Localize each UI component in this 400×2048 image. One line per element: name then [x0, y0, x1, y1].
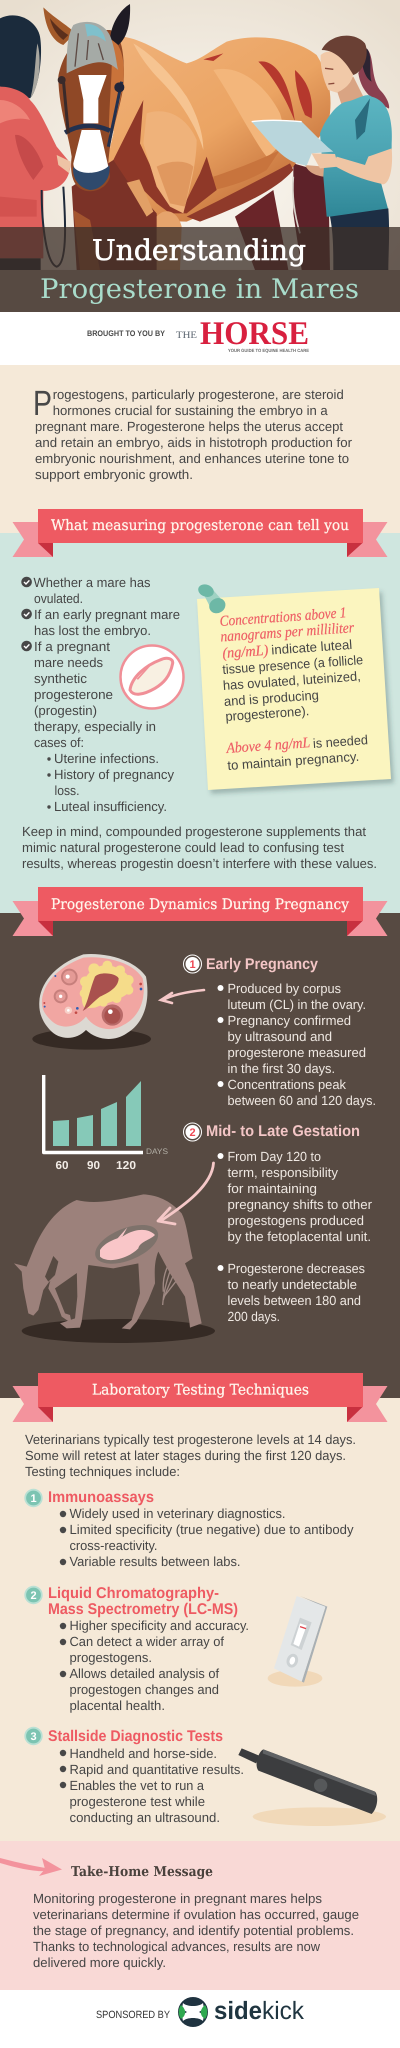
illustration: pregnant mare: [14, 1194, 215, 1343]
title bands: [0, 227, 400, 312]
checklist: what progesterone tells you: Uterine infections.: [54, 751, 159, 766]
gestation bullets: to nearly undetectable: [228, 1277, 357, 1292]
brought to you by The Horse logo: BROUGHT TO YOU BY: [87, 329, 166, 338]
sticky note: indicate luteal: [271, 637, 353, 657]
brought to you by The Horse logo: THE: [176, 330, 197, 341]
mid to late gestation heading: 2: [189, 1127, 196, 1139]
note on compounded supplements: results, whereas progestin doesn’t interfere with these values.: [22, 856, 377, 871]
gestation bullets: progestogens produced: [228, 1213, 364, 1228]
stallside diagnostic tests: 3: [30, 1731, 37, 1743]
tail hairs: [163, 1265, 178, 1305]
drop cap: P: [33, 384, 52, 423]
sponsored by sidekick logo: SPONSORED BY: [96, 2009, 170, 2021]
stallside diagnostic tests: progesterone test while: [70, 1794, 205, 1809]
vet on the right: [252, 36, 392, 270]
ribbon heading: what measuring progesterone can tell you: What measuring progesterone can tell you: [51, 518, 349, 534]
gestation bullets: [218, 1149, 373, 1324]
checklist: what progesterone tells you: History of pregnancy: [54, 767, 174, 782]
hero illustration: vets with horse: [0, 0, 400, 312]
corpus luteum: [80, 961, 134, 1008]
note on compounded supplements: [22, 824, 377, 871]
gestation bullets: pregnancy shifts to other: [228, 1197, 373, 1212]
sponsored by sidekick logo: side: [214, 1997, 262, 2025]
checklist: what progesterone tells you: If an early pregnant mare: [34, 607, 180, 622]
title: Progesterone in Mares: [40, 274, 359, 305]
early pregnancy bullets: luteum (CL) in the ovary.: [228, 997, 366, 1012]
ribbon heading: progesterone dynamics during pregnancy: [12, 887, 388, 936]
check icon: [21, 609, 32, 619]
horse head: [43, 4, 130, 191]
icon: sidekick mark: [178, 1997, 208, 2027]
testing intro: Some will retest at later stages during the first 120 days.: [25, 1448, 346, 1463]
liquid chromatography: Can detect a wider array of: [70, 1634, 224, 1649]
checklist: what progesterone tells you: (progestin): [34, 703, 97, 718]
gestation bullets: term, responsibility: [228, 1165, 338, 1180]
checklist: what progesterone tells you: loss.: [54, 783, 80, 798]
take-home message: [0, 1858, 359, 1970]
checklist: what progesterone tells you: ovulated.: [34, 591, 83, 606]
illustration: test cassette: [268, 1596, 327, 1687]
gestation bullets: by the fetoplacental unit.: [228, 1229, 371, 1244]
early pregnancy heading: 1: [189, 959, 196, 971]
liquid chromatography: placental health.: [70, 1698, 165, 1713]
sticky note: to maintain pregnancy.: [227, 749, 360, 773]
stallside diagnostic tests: Enables the vet to run a: [70, 1778, 205, 1793]
stallside diagnostic tests: Stallside Diagnostic Tests: [48, 1728, 223, 1745]
take-home message: veterinarians determine if ovulation has occurred, gauge: [33, 1907, 359, 1922]
liquid chromatography: 2: [30, 1590, 37, 1602]
take-home message: Take-Home Message: [71, 1864, 213, 1880]
early pregnancy bullets: Concentrations peak: [228, 1077, 346, 1092]
liquid chromatography: Higher specificity and accuracy.: [70, 1618, 249, 1633]
arrow: to ovary: [161, 990, 204, 1003]
brought to you by The Horse logo: [87, 316, 309, 353]
gestation bullets: for maintaining: [228, 1181, 317, 1196]
sticky note: and is producing: [223, 687, 319, 709]
check icon: [21, 641, 32, 651]
checklist: what progesterone tells you: mare needs: [34, 655, 103, 670]
early pregnancy bullets: Pregnancy confirmed: [228, 1013, 351, 1028]
bar chart: progesterone by days: 90: [87, 1160, 100, 1172]
sticky note: tissue presence (a follicle: [222, 652, 364, 677]
sticky note: [196, 582, 394, 794]
follicles: [54, 969, 123, 1026]
checklist: what progesterone tells you: Whether a mare has: [34, 575, 151, 590]
horse hip stripes: [203, 53, 312, 122]
ribbon heading: what measuring progesterone can tell you: [12, 509, 388, 557]
checklist: what progesterone tells you: has lost the embryo.: [34, 623, 151, 638]
bar chart: progesterone by days: [44, 1075, 168, 1172]
liquid chromatography: progestogens.: [70, 1650, 152, 1665]
checklist: what progesterone tells you: [21, 575, 180, 814]
sponsored by sidekick logo: kick: [262, 1997, 304, 2025]
stallside diagnostic tests: Rapid and quantitative results.: [70, 1762, 244, 1777]
note on compounded supplements: mimic natural progesterone could lead to confusing test: [22, 840, 344, 855]
mid to late gestation heading: Mid- to Late Gestation: [206, 1123, 360, 1140]
early pregnancy bullets: progesterone measured: [228, 1045, 366, 1060]
vet on the left: [0, 15, 71, 270]
sponsored by sidekick logo: [96, 1997, 304, 2027]
uterus: [90, 1217, 164, 1272]
intro paragraph: [33, 384, 353, 482]
bar chart: progesterone by days: 60: [56, 1160, 68, 1172]
testing intro: Testing techniques include:: [25, 1464, 180, 1479]
checklist: what progesterone tells you: progesterone: [34, 687, 113, 702]
illustration: ovary cross-section: [32, 954, 151, 1050]
icon: push pin: [196, 582, 228, 616]
checklist: what progesterone tells you: synthetic: [34, 671, 87, 686]
intro paragraph: support embryonic growth.: [35, 467, 193, 482]
brought to you by The Horse logo: HORSE: [200, 316, 309, 352]
icon: uterus in circle: [120, 646, 184, 708]
liquid chromatography: Mass Spectrometry (LC-MS): [48, 1601, 238, 1618]
ribbon heading: progesterone dynamics during pregnancy: Progesterone Dynamics During Pregnancy: [51, 897, 350, 913]
take-home message: the stage of pregnancy, and identify potential problems.: [33, 1923, 354, 1938]
sticky note: (ng/mL): [222, 643, 269, 662]
horse shading: [110, 43, 293, 222]
gestation bullets: 200 days.: [228, 1309, 280, 1324]
liquid chromatography: Allows detailed analysis of: [70, 1666, 219, 1681]
checklist: what progesterone tells you: If a pregnant: [34, 639, 110, 654]
gestation bullets: levels between 180 and: [228, 1293, 361, 1308]
blood vessels: [43, 975, 142, 1014]
intro paragraph: hormones crucial for sustaining the embryo in a: [53, 403, 328, 418]
horse hind legs: [235, 163, 330, 270]
take-home message: delivered more quickly.: [33, 1955, 166, 1970]
sticky note: Above 4 ng/mL: [225, 735, 311, 757]
ribbon heading: laboratory testing techniques: Laboratory Testing Techniques: [92, 1382, 309, 1398]
testing intro: Veterinarians typically test progesterone levels at 14 days.: [25, 1432, 356, 1447]
testing intro: [25, 1432, 356, 1479]
horse chest and forelegs: [72, 160, 182, 270]
bar chart: progesterone by days: DAYS: [146, 1147, 168, 1156]
liquid chromatography: progestogen changes and: [70, 1682, 219, 1697]
title: Understanding: [92, 234, 306, 267]
sticky note: is needed: [312, 732, 368, 751]
sticky note: nanograms per milliliter: [220, 620, 355, 645]
forelegs: [48, 1265, 88, 1323]
early pregnancy bullets: in the first 30 days.: [228, 1061, 335, 1076]
gestation bullets: Progesterone decreases: [228, 1261, 365, 1276]
note on compounded supplements: Keep in mind, compounded progesterone supplements that: [22, 824, 366, 839]
stallside diagnostic tests: conducting an ultrasound.: [70, 1810, 220, 1825]
take-home message: Thanks to technological advances, results are now: [33, 1939, 320, 1954]
stallside diagnostic tests: [24, 1727, 244, 1825]
immunoassays: Widely used in veterinary diagnostics.: [70, 1506, 286, 1521]
early pregnancy bullets: Produced by corpus: [228, 981, 341, 996]
immunoassays: cross-reactivity.: [70, 1538, 158, 1553]
sticky note: Concentrations above 1: [219, 605, 347, 630]
liquid chromatography: Liquid Chromatography-: [48, 1585, 219, 1602]
immunoassays: Immunoassays: [48, 1489, 154, 1506]
intro paragraph: rogestogens, particularly progesterone, are steroid: [53, 387, 344, 402]
early pregnancy bullets: by ultrasound and: [228, 1029, 332, 1044]
brought to you by The Horse logo: YOUR GUIDE TO EQUINE HEALTH CARE: [228, 348, 309, 353]
horse body: [100, 37, 331, 222]
arrow: to uterus: [158, 1163, 214, 1224]
illustration: handheld device: [238, 1748, 386, 1826]
check icon: [21, 577, 32, 587]
immunoassays: [24, 1489, 354, 1569]
checklist: what progesterone tells you: Luteal insufficiency.: [54, 799, 167, 814]
bar chart: progesterone by days: 120: [116, 1160, 136, 1172]
intro paragraph: pregnant mare. Progesterone helps the uterus accept: [35, 419, 343, 434]
stallside diagnostic tests: Handheld and horse-side.: [70, 1746, 217, 1761]
early pregnancy heading: Early Pregnancy: [206, 956, 318, 973]
arrow: take-home: [0, 1858, 62, 1876]
take-home message: Monitoring progesterone in pregnant mares helps: [33, 1891, 322, 1906]
early pregnancy bullets: between 60 and 120 days.: [228, 1093, 376, 1108]
sticky note: progesterone).: [225, 703, 310, 724]
intro paragraph: and retain an embryo, aids in histotroph production for: [35, 435, 353, 450]
intro paragraph: embryonic nourishment, and enhances uterine tone to: [35, 451, 349, 466]
checklist: what progesterone tells you: therapy, especially in: [34, 719, 156, 734]
early pregnancy bullets: [218, 981, 376, 1108]
immunoassays: Variable results between labs.: [70, 1554, 240, 1569]
ribbon heading: laboratory testing techniques: [12, 1373, 388, 1422]
immunoassays: 1: [30, 1493, 37, 1505]
immunoassays: Limited specificity (true negative) due to antibody: [70, 1522, 354, 1537]
liquid chromatography: [24, 1585, 249, 1713]
checklist: what progesterone tells you: cases of:: [34, 735, 84, 750]
title: [40, 234, 359, 305]
sticky note: has ovulated, luteinized,: [222, 668, 361, 693]
gestation bullets: From Day 120 to: [228, 1149, 321, 1164]
